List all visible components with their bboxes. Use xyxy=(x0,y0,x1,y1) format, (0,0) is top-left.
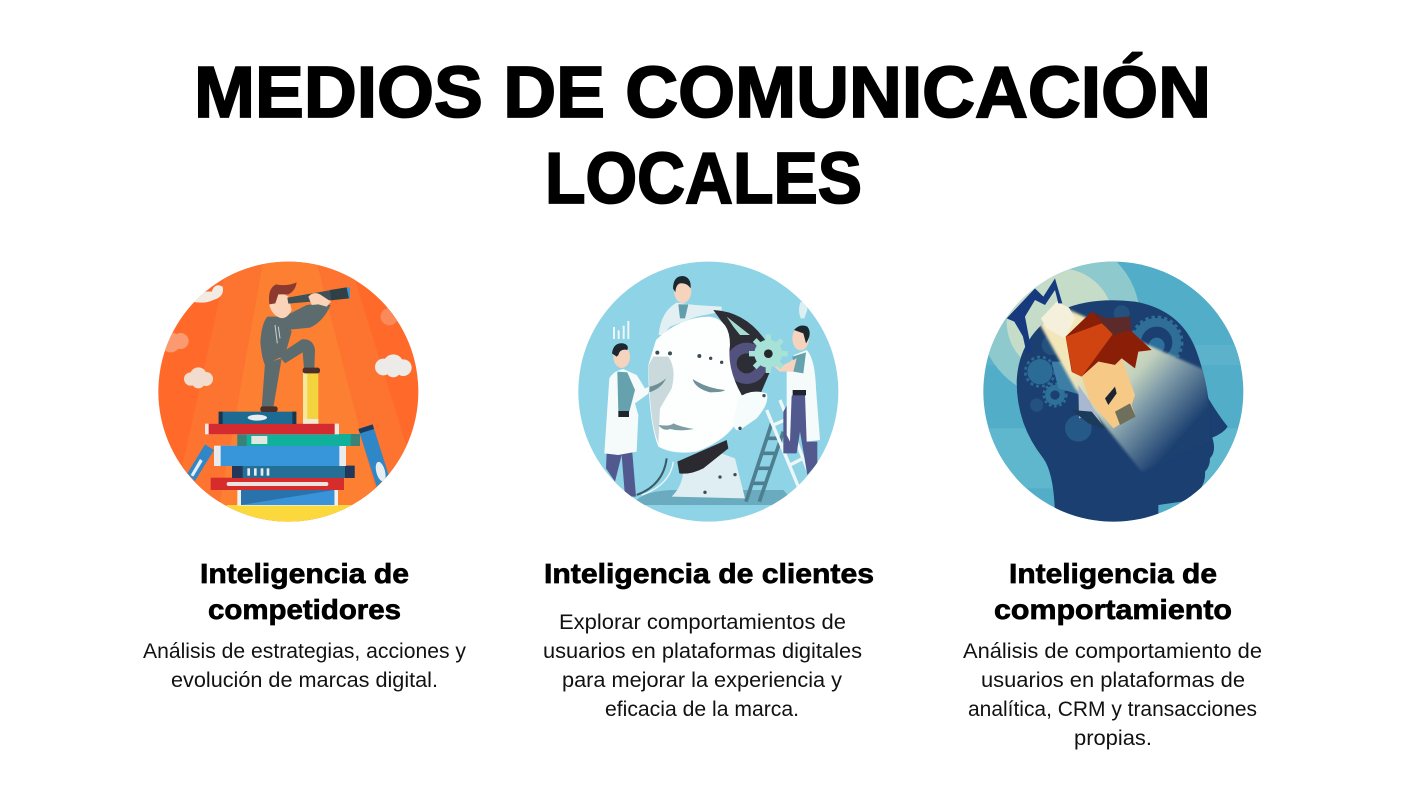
heading: Inteligencia de competidores: competidores xyxy=(208,594,401,625)
icon: man with telescope on books xyxy=(158,262,418,522)
icon: scientists building robot head xyxy=(578,262,838,522)
man xyxy=(260,303,331,408)
front gear xyxy=(754,340,782,368)
top scientist xyxy=(659,303,722,335)
panel: competitor intelligence xyxy=(143,255,466,692)
books xyxy=(187,444,214,481)
text: behaviour description: analítica, CRM y transacciones xyxy=(968,697,1257,721)
right scientist xyxy=(783,395,817,475)
head xyxy=(1017,300,1228,532)
text: competitor description xyxy=(143,639,466,692)
panel: behaviour intelligence xyxy=(963,238,1262,750)
text: behaviour description: propias. xyxy=(1074,726,1152,750)
gears behind head xyxy=(713,310,770,395)
text: behaviour description: Análisis de comportamiento de xyxy=(963,639,1262,663)
icon: head silhouette with flashlight xyxy=(983,262,1244,522)
robot neck xyxy=(672,452,745,498)
face xyxy=(648,317,742,453)
text: behaviour description xyxy=(963,639,1262,750)
heading: Inteligencia de competidores xyxy=(200,558,409,625)
text: competitor description: Análisis de estrategias, acciones y xyxy=(143,639,466,663)
heading: Inteligencia de comportamiento: comportamiento xyxy=(994,594,1232,625)
text: competitor description: evolución de marcas digital. xyxy=(171,668,438,692)
little man lifting xyxy=(1007,278,1062,353)
hair xyxy=(1066,312,1152,377)
heading: Inteligencia de comportamiento xyxy=(994,558,1232,625)
text: behaviour description: usuarios en plataformas de xyxy=(981,668,1245,692)
text: customer description: Explorar comportamientos de xyxy=(559,610,846,634)
gears xyxy=(1132,316,1184,358)
title xyxy=(194,52,1211,219)
title: MEDIOS DE COMUNICACIÓN xyxy=(194,52,1211,133)
heading: Inteligencia de competidores: Inteligencia de xyxy=(200,558,409,589)
text: customer description xyxy=(543,610,862,721)
light beam xyxy=(1038,305,1208,472)
text: customer description: usuarios en plataformas digitales xyxy=(543,639,862,663)
face xyxy=(1082,358,1135,428)
heading: Inteligencia de clientes: Inteligencia de clientes xyxy=(544,558,874,589)
title: LOCALES xyxy=(545,139,862,219)
text: customer description: para mejorar la experiencia y xyxy=(562,668,842,692)
heading: Inteligencia de comportamiento: Inteligencia de xyxy=(1009,558,1217,589)
ladder xyxy=(746,423,783,502)
panel: customer intelligence xyxy=(543,255,874,721)
pencil xyxy=(303,372,318,424)
left scientist xyxy=(606,452,636,497)
text: customer description: eficacia de la marca. xyxy=(605,697,799,721)
